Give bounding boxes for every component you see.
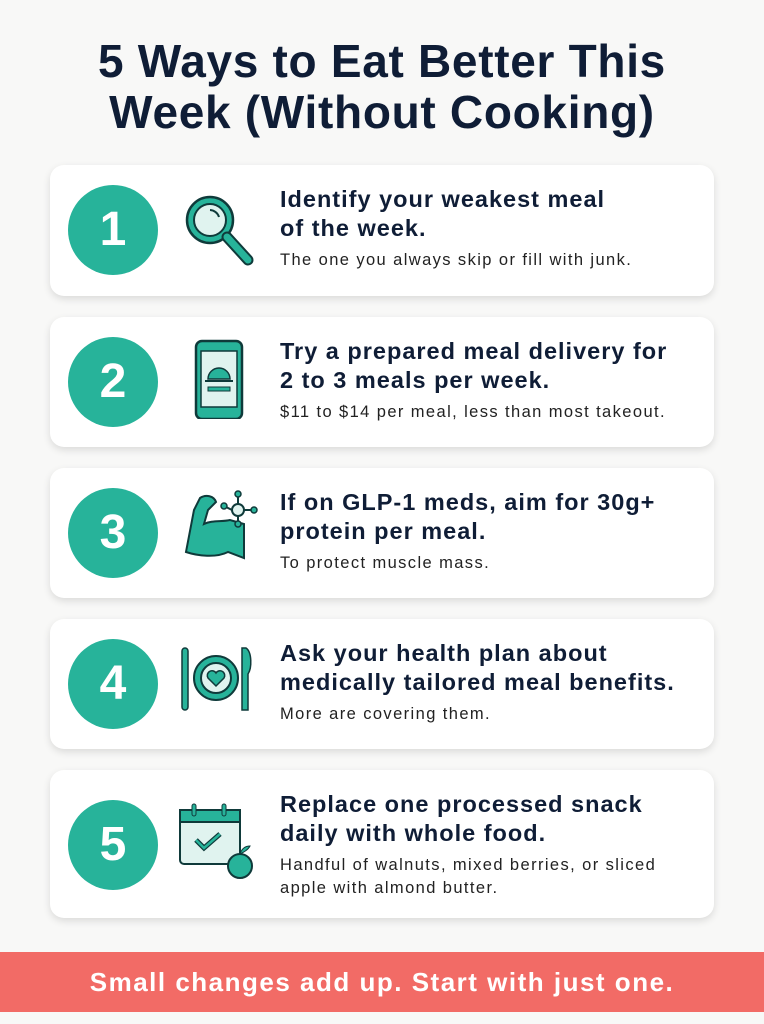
number 4 — [68, 639, 158, 729]
icon: flexed arm with molecule — [184, 490, 258, 560]
number 4: 4 — [100, 657, 126, 710]
text: step 4 — [280, 640, 675, 723]
title: 5 Ways to Eat Better This — [98, 35, 666, 87]
number 1: 1 — [100, 203, 126, 256]
text: step 4: More are covering them. — [280, 705, 491, 723]
text: step 1: of the week. — [280, 215, 427, 241]
panel: step 1 — [50, 165, 714, 296]
number 3: 3 — [100, 506, 126, 559]
text: step 4: medically tailored meal benefits. — [280, 669, 675, 695]
number 2 — [68, 337, 158, 427]
number 2: 2 — [100, 355, 126, 408]
text: step 1 — [280, 186, 632, 269]
text: step 2: 2 to 3 meals per week. — [280, 367, 550, 393]
text: step 3: To protect muscle mass. — [280, 554, 490, 572]
text: step 3: If on GLP-1 meds, aim for 30g+ — [280, 489, 655, 515]
title — [98, 35, 666, 138]
text: step 2: $11 to $14 per meal, less than most takeout. — [280, 403, 666, 421]
text: step 1: The one you always skip or fill with junk. — [280, 251, 632, 269]
icon: phone with meal — [194, 340, 244, 419]
icon: calendar with apple — [179, 804, 253, 879]
text: step 3: protein per meal. — [280, 518, 486, 544]
text: step 1: Identify your weakest meal — [280, 186, 605, 212]
panel: step 3 — [50, 468, 714, 598]
panel: step 2 — [50, 317, 714, 447]
title: Week (Without Cooking) — [109, 86, 655, 138]
icon: magnifying glass — [186, 196, 254, 266]
icon: plate with heart — [181, 647, 252, 711]
panel: step 4 — [50, 619, 714, 749]
text: step 5: daily with whole food. — [280, 820, 546, 846]
text: step 3 — [280, 489, 655, 572]
footer banner — [0, 952, 764, 1012]
number 5 — [68, 800, 158, 890]
text: step 5: apple with almond butter. — [280, 879, 498, 897]
number 5: 5 — [100, 818, 126, 871]
text: step 5 — [280, 791, 656, 897]
panel: step 5 — [50, 770, 714, 918]
text: step 5: Replace one processed snack — [280, 791, 643, 817]
text: step 4: Ask your health plan about — [280, 640, 608, 666]
number 3 — [68, 488, 158, 578]
text: step 2 — [280, 338, 667, 421]
number 1 — [68, 185, 158, 275]
text: step 2: Try a prepared meal delivery for — [280, 338, 667, 364]
footer banner: Small changes add up. Start with just one. — [90, 967, 674, 997]
text: step 5: Handful of walnuts, mixed berries, or sliced — [280, 856, 656, 874]
